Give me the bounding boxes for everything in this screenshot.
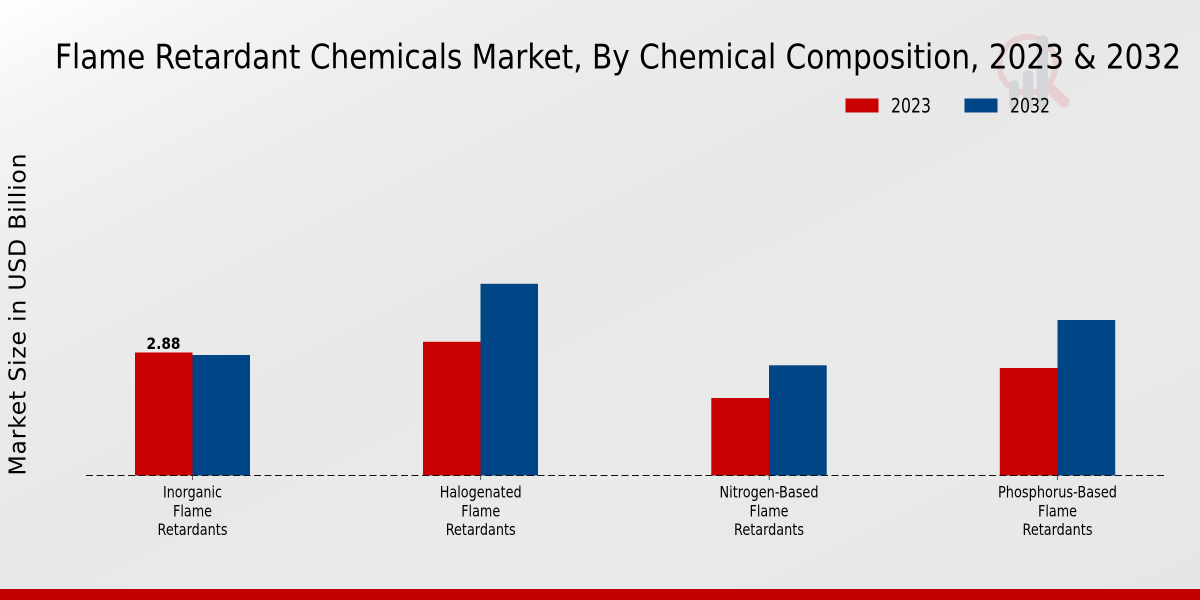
data label: 2.88 [146, 334, 180, 353]
category label: Halogenated Flame Retardants: Retardants [446, 520, 516, 539]
legend [846, 94, 1050, 118]
bars: Phosphorus-Based Flame Retardants [1000, 320, 1115, 476]
legend: 2032 [964, 94, 1050, 118]
category label: Inorganic Flame Retardants: Flame [173, 502, 212, 520]
category label: Halogenated Flame Retardants: Flame [461, 502, 500, 520]
bars: Halogenated Flame Retardants [423, 284, 538, 476]
legend: 2023 [846, 94, 931, 118]
bar chart [86, 284, 1164, 480]
y axis title: Market Size in USD Billion [4, 154, 32, 476]
category label: Phosphorus-Based Flame Retardants: Retardants [1022, 520, 1092, 539]
category label: Inorganic Flame Retardants [158, 482, 228, 539]
bars: Inorganic Flame Retardants [135, 352, 250, 476]
legend: 2032: 2032 [1010, 94, 1050, 118]
bars: Nitrogen-Based Flame Retardants [711, 365, 827, 476]
category label: Nitrogen-Based Flame Retardants: Nitrogen-Based [720, 482, 818, 502]
category label: Nitrogen-Based Flame Retardants: Retardants [734, 520, 804, 539]
category label: Halogenated Flame Retardants: Halogenated [440, 482, 522, 502]
baseline axis [86, 474, 1164, 476]
category label: Inorganic Flame Retardants: Inorganic [163, 482, 222, 502]
category label: Inorganic Flame Retardants: Retardants [158, 520, 228, 539]
bottom red band [0, 589, 1200, 600]
watermark logo [1000, 35, 1064, 110]
category label: Nitrogen-Based Flame Retardants: Flame [750, 502, 788, 520]
category label: Halogenated Flame Retardants [440, 482, 522, 539]
category label: Nitrogen-Based Flame Retardants [720, 482, 818, 539]
category label: Phosphorus-Based Flame Retardants: Flame [1038, 502, 1077, 520]
legend: 2023: 2023 [891, 94, 931, 118]
category label: Phosphorus-Based Flame Retardants [998, 482, 1117, 539]
category label: Phosphorus-Based Flame Retardants: Phosphorus-Based [998, 482, 1117, 502]
